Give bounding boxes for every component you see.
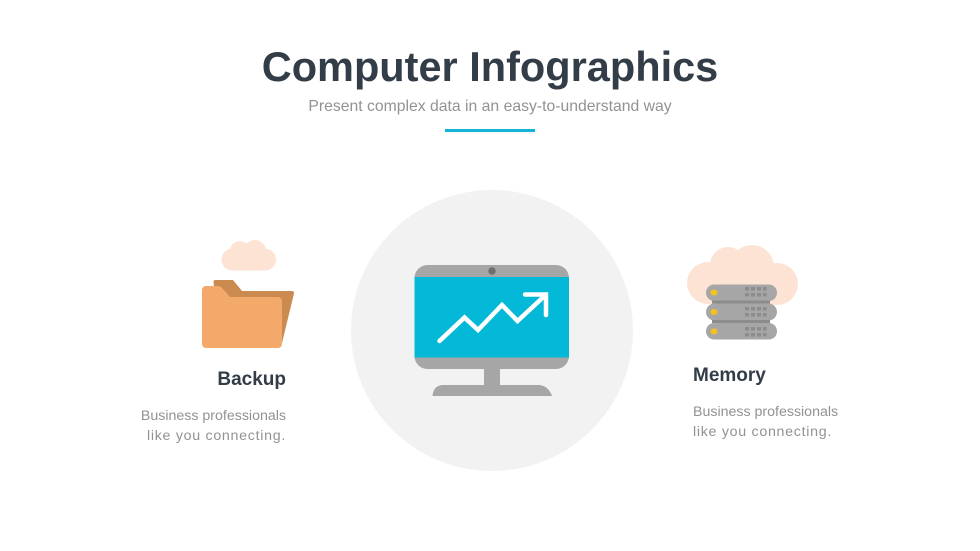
title underline — [445, 129, 535, 132]
heading: Backup: Backup — [217, 369, 286, 390]
icon: computer monitor with rising chart — [414, 265, 569, 396]
subtitle: Present complex data in an easy-to-understand way — [308, 98, 672, 115]
central circle — [351, 190, 633, 471]
text block: Backup description: Business professionals — [141, 408, 286, 424]
text block: Memory description: like you connecting. — [693, 424, 832, 440]
heading: Memory: Memory — [693, 365, 766, 386]
icon: folder with cloud — [202, 240, 294, 348]
text block: Backup description: like you connecting. — [147, 428, 286, 444]
icon: cloud server stack — [687, 245, 798, 340]
title: Computer Infographics — [262, 43, 718, 90]
text block: Memory description: Business professionals — [693, 404, 838, 420]
text block: Backup description — [141, 408, 286, 444]
text block: Memory description — [693, 404, 838, 440]
